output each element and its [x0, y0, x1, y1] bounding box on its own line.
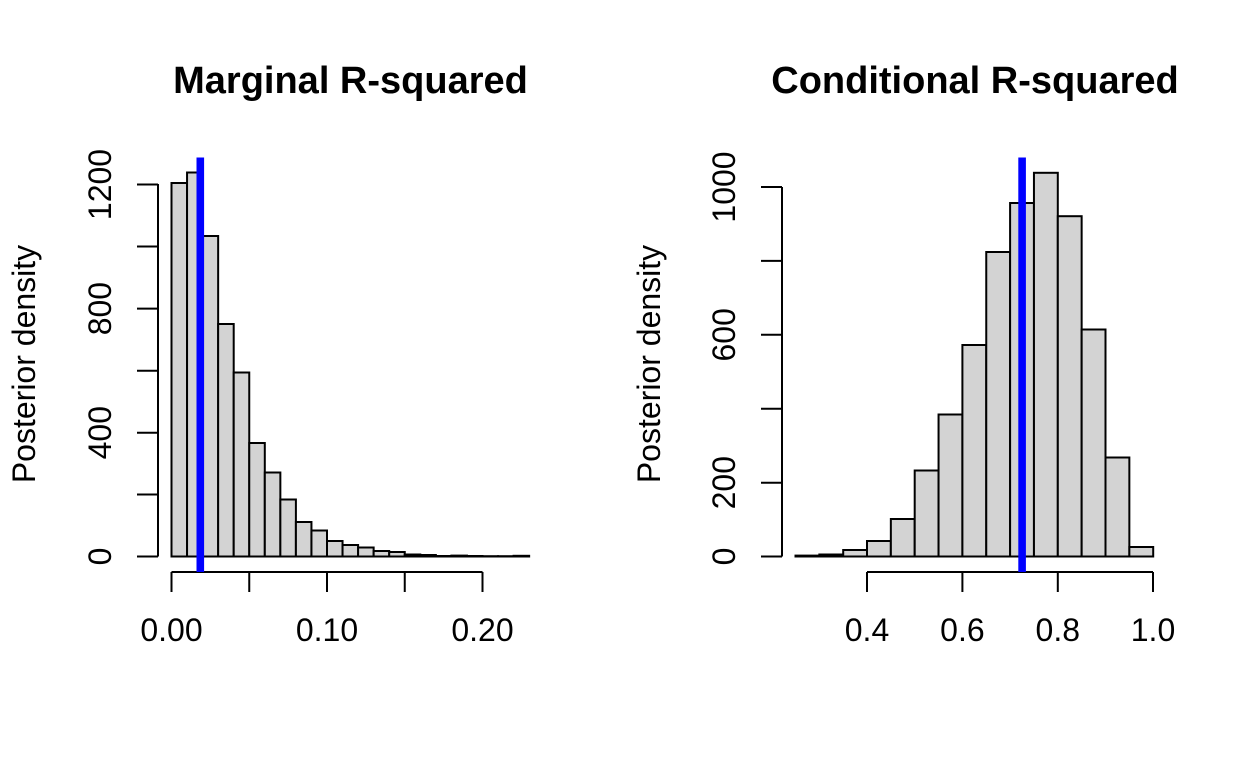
y axis: 400	[82, 406, 118, 459]
x axis	[845, 572, 1175, 648]
histogram bars	[796, 173, 1153, 557]
y axis label: Posterior density	[631, 245, 667, 483]
y axis: 200	[706, 456, 742, 509]
y axis: 1200	[82, 149, 118, 220]
title: Conditional R-squared: Conditional R-squared	[771, 60, 1179, 102]
y axis: 1000	[706, 151, 742, 223]
y axis: 600	[706, 308, 742, 361]
y axis: 0	[82, 548, 118, 565]
y axis	[82, 149, 158, 565]
x axis: 0.20	[451, 612, 514, 648]
x axis	[140, 572, 514, 648]
y axis	[706, 151, 782, 565]
panel: marginal R-squared	[6, 60, 529, 648]
median marker line	[1018, 158, 1026, 572]
y axis: 800	[82, 282, 118, 335]
x axis: 0.10	[296, 612, 358, 648]
y axis: 0	[706, 548, 742, 565]
x axis: 0.8	[1036, 612, 1080, 648]
x axis: 0.6	[940, 612, 985, 648]
title: Marginal R-squared: Marginal R-squared	[173, 60, 528, 102]
y axis label: Posterior density	[6, 245, 42, 483]
panel: conditional R-squared	[631, 60, 1179, 648]
x axis: 0.00	[140, 612, 203, 648]
x axis: 1.0	[1131, 612, 1175, 648]
x axis: 0.4	[845, 612, 889, 648]
median marker line	[196, 158, 204, 572]
histogram bars	[172, 172, 529, 556]
